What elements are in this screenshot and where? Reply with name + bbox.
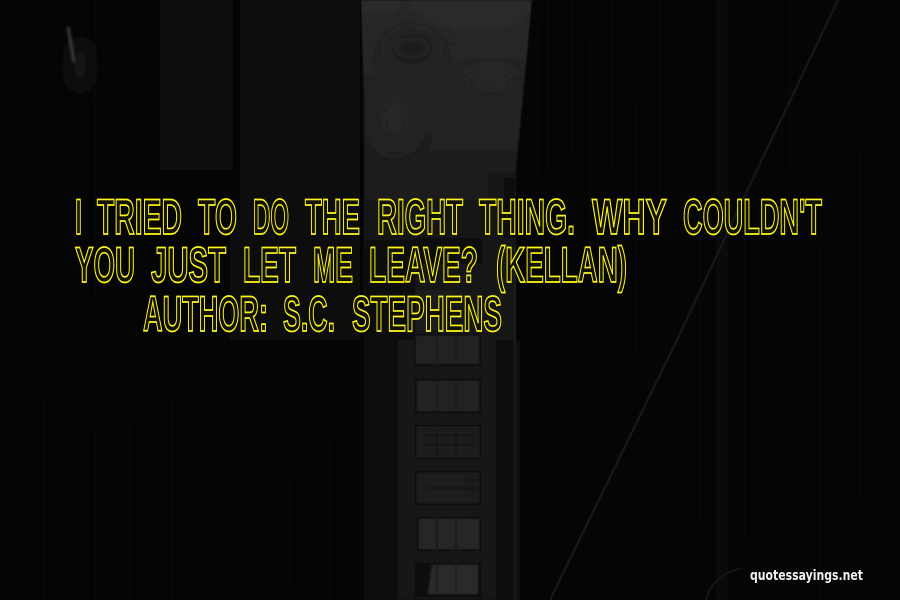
author line: S.C.: [283, 286, 335, 342]
author line: STEPHENS: [352, 286, 502, 342]
glint on left building: [68, 37, 92, 93]
quote text: JUST: [151, 237, 226, 293]
author line: AUTHOR:: [143, 286, 268, 342]
quote text: WHY: [592, 189, 667, 245]
quote text: THE: [305, 189, 360, 245]
quote text: LEAVE?: [369, 237, 478, 293]
diagonal cable: [550, 0, 838, 600]
quote text: TO: [198, 189, 237, 245]
author line: [143, 286, 502, 342]
quote text: LET: [243, 237, 296, 293]
quote text: ME: [313, 237, 353, 293]
watermark: quotessayings.net: [750, 568, 863, 584]
central building with windows: [364, 170, 520, 600]
quote text: I: [75, 189, 82, 245]
quote text: (KELLAN): [496, 237, 627, 293]
quote text: RIGHT: [377, 189, 463, 245]
quote text: [75, 189, 822, 293]
sky gap between buildings: [361, 0, 532, 340]
quote text: TRIED: [97, 189, 182, 245]
quote text: THING.: [479, 189, 575, 245]
quote text: YOU: [75, 237, 135, 293]
quote text: DO: [253, 189, 289, 245]
